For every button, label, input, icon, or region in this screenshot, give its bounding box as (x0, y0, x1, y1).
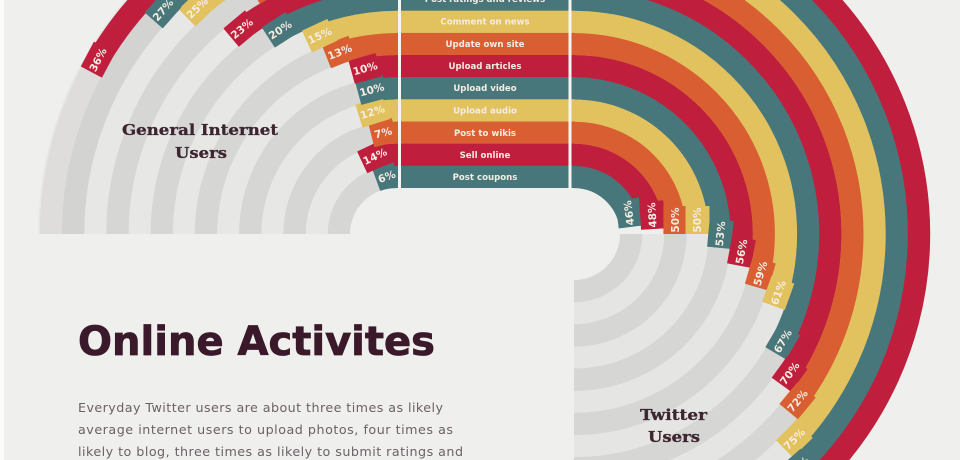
chart: percentage tags general internet users: 10% (352, 60, 380, 78)
heading: general internet users: General Internet (122, 121, 278, 139)
chart: percentage tags twitter users: 72% (785, 387, 811, 415)
column labels: online activities: Post to wikis (454, 129, 516, 139)
heading: twitter users: Users (648, 428, 700, 446)
chart: percentage tags general internet users: 36% (87, 46, 110, 74)
column labels: online activities: Update own site (446, 40, 525, 50)
chart: percentage tags general internet users: 13% (326, 42, 354, 63)
column labels: online activities (425, 0, 545, 183)
column labels: online activities: Comment on news (440, 18, 530, 28)
chart: percentage tags general internet users: 20% (267, 18, 295, 42)
heading: general internet users (122, 121, 278, 162)
chart: percentage tags twitter users: 59% (752, 260, 770, 288)
chart: percentage tags general internet users: 12% (359, 103, 387, 122)
column labels: online activities: Upload audio (453, 106, 517, 116)
chart: percentage tags twitter users: 75% (782, 426, 808, 453)
chart: percentage tags general internet users (81, 0, 401, 191)
text block: description: likely to blog, three times as likely to submit ratings and (78, 444, 463, 459)
chart: percentage tags general internet users: 15% (306, 25, 334, 47)
chart: percentage tags twitter users: 50% (670, 207, 682, 233)
panel: twitter users grey quadrant (574, 234, 797, 460)
panel: general internet users grey quadrant (40, 0, 380, 234)
chart: percentage tags general internet users: 14% (361, 146, 390, 168)
title: Online Activites (78, 319, 435, 365)
chart: percentage tags twitter users: 50% (692, 207, 704, 233)
column labels: online activities: Post coupons (453, 173, 517, 183)
chart: percentage tags general internet users: 7% (373, 125, 394, 141)
chart: percentage tags general internet users: 6% (377, 168, 398, 186)
chart: percentage tags twitter users: 61% (769, 279, 789, 307)
chart: percentage tags twitter users: 56% (734, 238, 750, 265)
column dividers (398, 0, 572, 188)
chart: right arcs for twitter users (574, 0, 930, 460)
heading: twitter users (640, 406, 708, 446)
chart: percentage tags twitter users: 70% (778, 360, 803, 387)
chart: straight centre bands (395, 0, 575, 188)
text block: description: Everyday Twitter users are about three times as likely (78, 400, 443, 415)
column labels: online activities: Upload articles (448, 62, 522, 72)
text block: description (78, 400, 463, 459)
chart: percentage tags twitter users: 67% (772, 327, 795, 355)
heading: twitter users: Twitter (640, 406, 708, 424)
chart: left arcs for general internet users (82, 0, 396, 191)
chart: percentage tags twitter users: 48% (646, 202, 660, 228)
heading: general internet users: Users (175, 144, 227, 162)
chart: percentage tags twitter users: 53% (714, 220, 728, 247)
column labels: online activities: Upload video (453, 84, 517, 94)
text block: description: average internet users to upload photos, four times as (78, 422, 453, 437)
chart: percentage tags twitter users (615, 198, 816, 460)
column labels: online activities: Sell online (460, 151, 511, 161)
chart: percentage tags general internet users: 10% (358, 81, 386, 99)
chart: percentage tags general internet users: 23% (229, 16, 256, 42)
chart: percentage tags twitter users: 46% (622, 199, 637, 226)
